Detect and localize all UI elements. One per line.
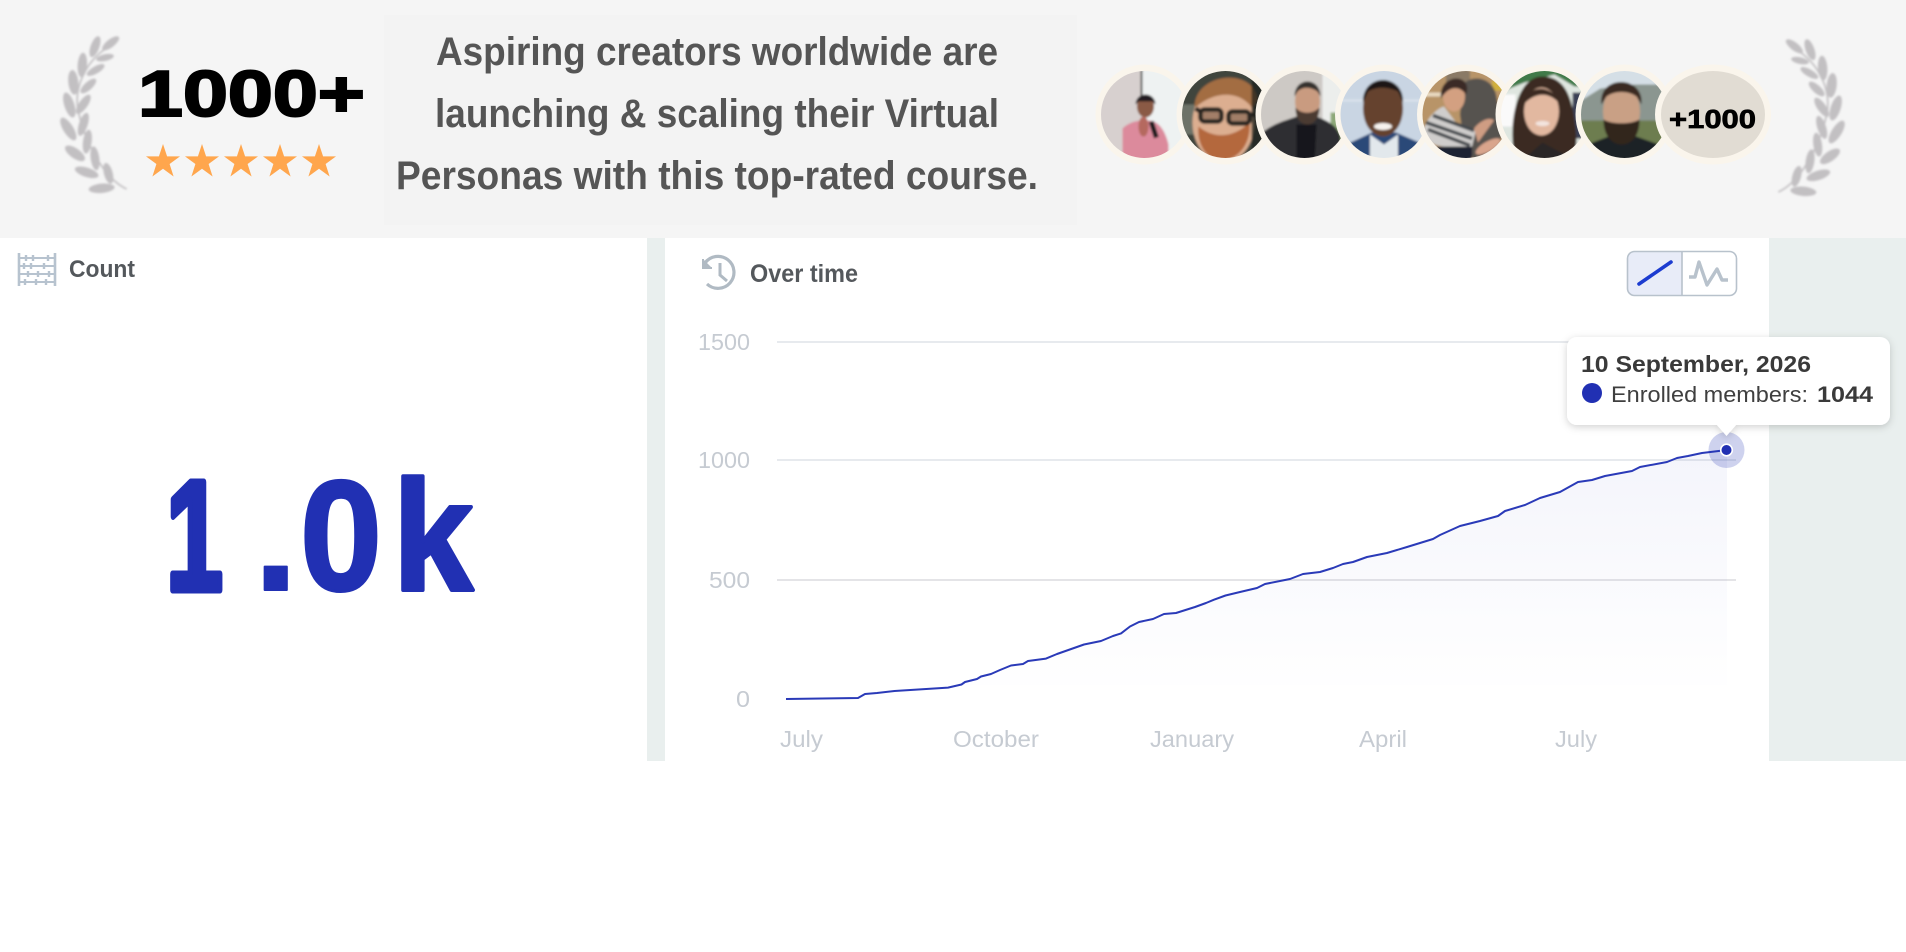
avatar overflow count: +1000: [1669, 104, 1756, 134]
x axis labels: January: [1150, 726, 1235, 752]
x axis labels: April: [1359, 726, 1407, 752]
banner statement: [384, 15, 1077, 225]
y axis labels: 500: [709, 567, 750, 593]
line chart: enrolled members: [698, 329, 1744, 752]
avatar overflow count: [1655, 64, 1771, 164]
banner statement: Personas with this top-rated course.: [396, 154, 1038, 198]
tooltip: [1567, 337, 1890, 436]
right laurel: [1778, 37, 1848, 197]
right side background strip: [1769, 238, 1906, 761]
panel title: count: Count: [69, 256, 135, 283]
x axis labels: October: [953, 726, 1039, 752]
big count value: 0: [300, 449, 382, 624]
area under curve: [786, 450, 1727, 700]
five star rating: [146, 144, 336, 176]
panel: count: [19, 253, 474, 624]
chart type toggle: [1628, 252, 1736, 296]
y axis labels: [698, 329, 750, 712]
left laurel: [57, 34, 127, 194]
avatar 4: smiling man in blue suit: [1335, 64, 1424, 164]
icon: abacus: [19, 253, 55, 286]
big count value: [166, 449, 474, 624]
icon: history clock: [703, 256, 734, 288]
x axis labels: July: [780, 726, 824, 752]
y axis labels: 0: [736, 686, 750, 712]
y axis labels: 1000: [698, 447, 750, 473]
highlighted end point: [1708, 432, 1744, 468]
enrolment line: [786, 450, 1727, 699]
avatar 5: woman hugging dog: [1417, 64, 1505, 164]
tooltip: 1044: [1817, 382, 1874, 407]
panel: over time: [698, 252, 1890, 752]
avatar 6: smiling woman with dark hair: [1496, 64, 1584, 164]
headline count: 1000+: [138, 57, 365, 130]
banner statement: launching & scaling their Virtual: [435, 92, 999, 136]
y axis labels: 1500: [698, 329, 750, 355]
panel title: over time: Over time: [750, 260, 858, 288]
big count value: k: [393, 449, 474, 624]
x axis labels: [780, 726, 1598, 752]
avatar 3: man in dark blazer: [1256, 64, 1344, 164]
avatar 2: bearded man with glasses: [1176, 64, 1264, 164]
big count value: .: [254, 449, 298, 624]
big count value: 1: [166, 449, 223, 624]
header banner: [0, 0, 1906, 238]
avatar row: [1094, 64, 1771, 165]
avatar 7: bearded man with mountains: [1576, 64, 1664, 164]
tooltip: Enrolled members:: [1611, 382, 1808, 407]
avatar 1: speaker in pink shirt: [1096, 64, 1184, 164]
infographic canvas: [0, 0, 1906, 761]
tooltip: 10 September, 2026: [1581, 351, 1811, 377]
x axis labels: July: [1555, 726, 1598, 752]
banner statement: Aspiring creators worldwide are: [436, 30, 998, 74]
gutter between panels: [647, 238, 665, 761]
